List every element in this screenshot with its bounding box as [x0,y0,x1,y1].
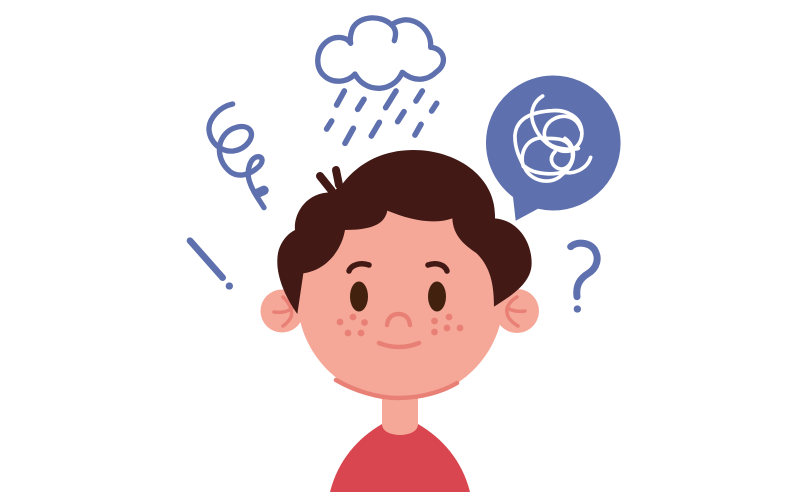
hair [277,150,532,314]
bubble shape [486,75,621,221]
hair tuft [320,170,339,191]
face [298,196,504,400]
left eyebrow [349,264,369,271]
icon: exclamation mark [190,241,233,290]
hair mass [277,150,532,314]
right eye [428,282,446,312]
shirt [330,424,470,492]
chin line [336,380,457,398]
right ear [495,289,539,333]
neck [382,385,418,435]
left eye [350,282,368,312]
icon: spiral squiggle [209,104,264,208]
nose [387,314,410,325]
left ear [260,290,304,332]
left freckles [337,314,368,336]
right freckles [431,314,463,335]
speech bubble with scribble [486,75,621,221]
icon: rain cloud [318,18,443,143]
icon: question mark [571,243,597,313]
right eyebrow [428,264,447,271]
scribble [515,96,591,181]
mouth [379,343,419,347]
